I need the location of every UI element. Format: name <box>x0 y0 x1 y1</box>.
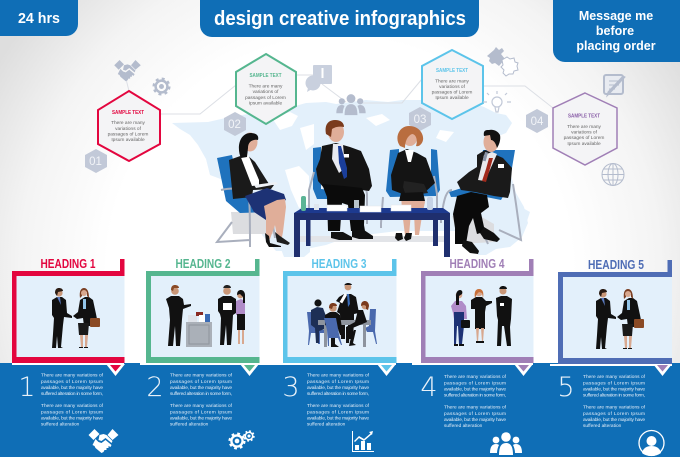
body text 4: available, but the majority have <box>444 417 506 423</box>
panel 3 <box>275 257 396 452</box>
icon: white profile circle <box>639 430 664 456</box>
figures: handshake <box>52 288 100 348</box>
top right badge: message: before <box>596 24 634 38</box>
frame 2 <box>146 259 260 363</box>
body text 5: available, but the majority have <box>583 417 645 423</box>
floor shadows <box>231 212 494 244</box>
body text 5: There are many variations of <box>583 404 646 410</box>
body text 2: suffered alteration in some form, <box>170 391 232 397</box>
world map <box>172 100 530 257</box>
icon: notepad and pencil <box>604 75 625 96</box>
hexagon 01: red: passages of Lorem <box>108 132 148 138</box>
body text 3: There are many variations of <box>307 372 370 378</box>
frame 4 <box>421 259 534 363</box>
body text 4: suffered alteration in some form, <box>444 392 506 398</box>
figures: meeting around a table <box>307 283 377 347</box>
body text 5: suffered alteration <box>583 423 622 429</box>
top right badge: message <box>553 0 680 62</box>
body text 3 <box>307 372 370 428</box>
title banner <box>200 0 479 37</box>
body text 1: passages of Lorem Ipsum <box>41 379 103 385</box>
heading 4: HEADING 4 <box>450 257 505 271</box>
hexagon 02: green: variations of <box>253 89 279 95</box>
number 1: 1 <box>18 372 36 403</box>
figures: office colleagues at a desk <box>166 285 245 347</box>
body text 3: There are many variations of <box>307 403 370 409</box>
icon: info chat <box>306 65 332 92</box>
hexagon 02: green: Ipsum available <box>249 100 282 106</box>
connector lines <box>125 75 553 114</box>
body text 2: passages of Lorem Ipsum <box>170 379 232 385</box>
body text 3: suffered alteration <box>307 422 346 428</box>
body text 1: There are many variations of <box>41 372 104 378</box>
body text 1: suffered alteration <box>41 422 80 428</box>
heading 1: HEADING 1 <box>40 257 96 271</box>
hexagon 03: blue: SAMPLE TEXT <box>436 68 468 74</box>
icon: grey team <box>336 94 366 115</box>
hexagon 02: green <box>236 54 296 124</box>
hexagon 01: red: There are many <box>111 120 146 126</box>
body text 4: passages of Lorem Ipsum <box>444 411 506 417</box>
icon: white handshake <box>88 429 118 453</box>
body text 3: passages of Lorem Ipsum <box>307 379 369 385</box>
body text 2: available, but the majority have <box>170 385 232 391</box>
body text 2: suffered alteration <box>170 422 209 428</box>
icon: white bar chart <box>352 431 374 452</box>
number hexagons <box>85 107 548 173</box>
hexagon 03: blue: variations of <box>439 84 466 90</box>
body text 3: passages of Lorem Ipsum <box>307 410 369 416</box>
frame 5 <box>558 260 672 364</box>
number 2: 2 <box>146 372 164 403</box>
hexagon 01: red: SAMPLE TEXT <box>112 110 144 116</box>
body text 1: available, but the majority have <box>41 416 103 422</box>
hexagon 01: red: Ipsum available <box>111 137 145 143</box>
heading 3: HEADING 3 <box>312 257 367 271</box>
body text 3: available, but the majority have <box>307 416 369 422</box>
title banner: design creative infographics <box>214 8 466 30</box>
icon: globe <box>602 164 624 186</box>
hexagon 01: red: variations of <box>115 126 142 132</box>
person 3: woman with orange hair <box>381 126 440 241</box>
hexagon 04: purple: passages of Lorem <box>564 135 604 141</box>
top right badge: message: Message me <box>579 9 653 23</box>
person 1: woman taking notes <box>217 132 290 247</box>
frame 1 <box>12 259 124 363</box>
number 5: 5 <box>557 372 575 403</box>
hexagon 03: blue: passages of Lorem <box>432 90 472 96</box>
heading 2: HEADING 2 <box>176 257 231 271</box>
body text 1 <box>41 372 104 428</box>
body text 5: passages of Lorem Ipsum <box>583 411 645 417</box>
body text 2 <box>170 372 233 428</box>
number 3: 3 <box>282 372 300 403</box>
figures: three colleagues <box>451 286 512 346</box>
person 4: man crossing legs <box>441 130 521 254</box>
body text 2: available, but the majority have <box>170 416 232 422</box>
body text 1: There are many variations of <box>41 403 104 409</box>
body text 5: There are many variations of <box>583 374 646 380</box>
body text 2: There are many variations of <box>170 372 233 378</box>
hexagon 02: green: passages of Lorem <box>245 95 286 101</box>
heading 5: HEADING 5 <box>588 258 644 272</box>
icon: white team <box>490 432 522 455</box>
top left badge: 24 hrs <box>0 0 78 36</box>
conference table <box>294 196 450 257</box>
body text 1: available, but the majority have <box>41 385 103 391</box>
figures: handshake <box>596 289 644 349</box>
hexagon 04: purple: Ipsum available <box>567 141 601 147</box>
illustration: panel discussion <box>217 120 521 257</box>
body text 4: suffered alteration <box>444 423 483 429</box>
body text 5: available, but the majority have <box>583 386 645 392</box>
icon: white gears <box>230 431 254 448</box>
number hexagons: 04 <box>531 116 544 128</box>
hexagon 02: green: SAMPLE TEXT <box>250 73 282 79</box>
hexagon 03: blue: There are many <box>435 78 470 84</box>
body text 4: There are many variations of <box>444 374 507 380</box>
panel 4 <box>412 257 534 455</box>
icon: grey gear <box>154 79 169 94</box>
hexagon 04: purple: There are many <box>567 124 602 130</box>
body text 3: suffered alteration in some form, <box>307 391 369 397</box>
body text 5: passages of Lorem Ipsum <box>583 380 645 386</box>
body text 2: There are many variations of <box>170 403 233 409</box>
body text 3: available, but the majority have <box>307 385 369 391</box>
bottom blue band <box>0 363 680 457</box>
body text 2: passages of Lorem Ipsum <box>170 410 232 416</box>
body text 4: available, but the majority have <box>444 386 506 392</box>
icon: light bulb <box>483 91 511 112</box>
number hexagons: 02 <box>228 119 241 131</box>
hexagon 02: green: There are many <box>249 84 283 90</box>
icon: grey handshake <box>114 60 141 81</box>
panel 1 <box>12 257 125 453</box>
body text 4: passages of Lorem Ipsum <box>444 380 506 386</box>
panel 2 <box>140 257 276 448</box>
body text 1: suffered alteration in some form, <box>41 391 103 397</box>
frame 3 <box>283 259 396 363</box>
icon: puzzle pieces <box>487 47 518 76</box>
top left badge: 24 hrs: 24 hrs <box>18 11 60 27</box>
number 4: 4 <box>420 372 438 403</box>
hexagon 03: blue <box>422 50 483 119</box>
hexagon 04: purple: SAMPLE TEXT <box>568 114 600 120</box>
number hexagons: 03 <box>414 114 426 126</box>
body text 4 <box>444 374 507 429</box>
person 2: man with blue tie <box>309 120 373 240</box>
hexagon 01: red <box>98 91 160 161</box>
hexagon 03: blue: Ipsum available <box>435 95 469 101</box>
body text 4: There are many variations of <box>444 404 507 410</box>
hexagon 04: purple <box>553 93 617 165</box>
body text 5: suffered alteration in some form, <box>583 392 645 398</box>
panel 5 <box>550 258 672 456</box>
top right badge: message: placing order <box>576 39 656 53</box>
number hexagons: 01 <box>89 156 102 168</box>
body text 5 <box>583 374 646 429</box>
hexagon 04: purple: variations of <box>571 130 598 136</box>
body text 1: passages of Lorem Ipsum <box>41 410 103 416</box>
